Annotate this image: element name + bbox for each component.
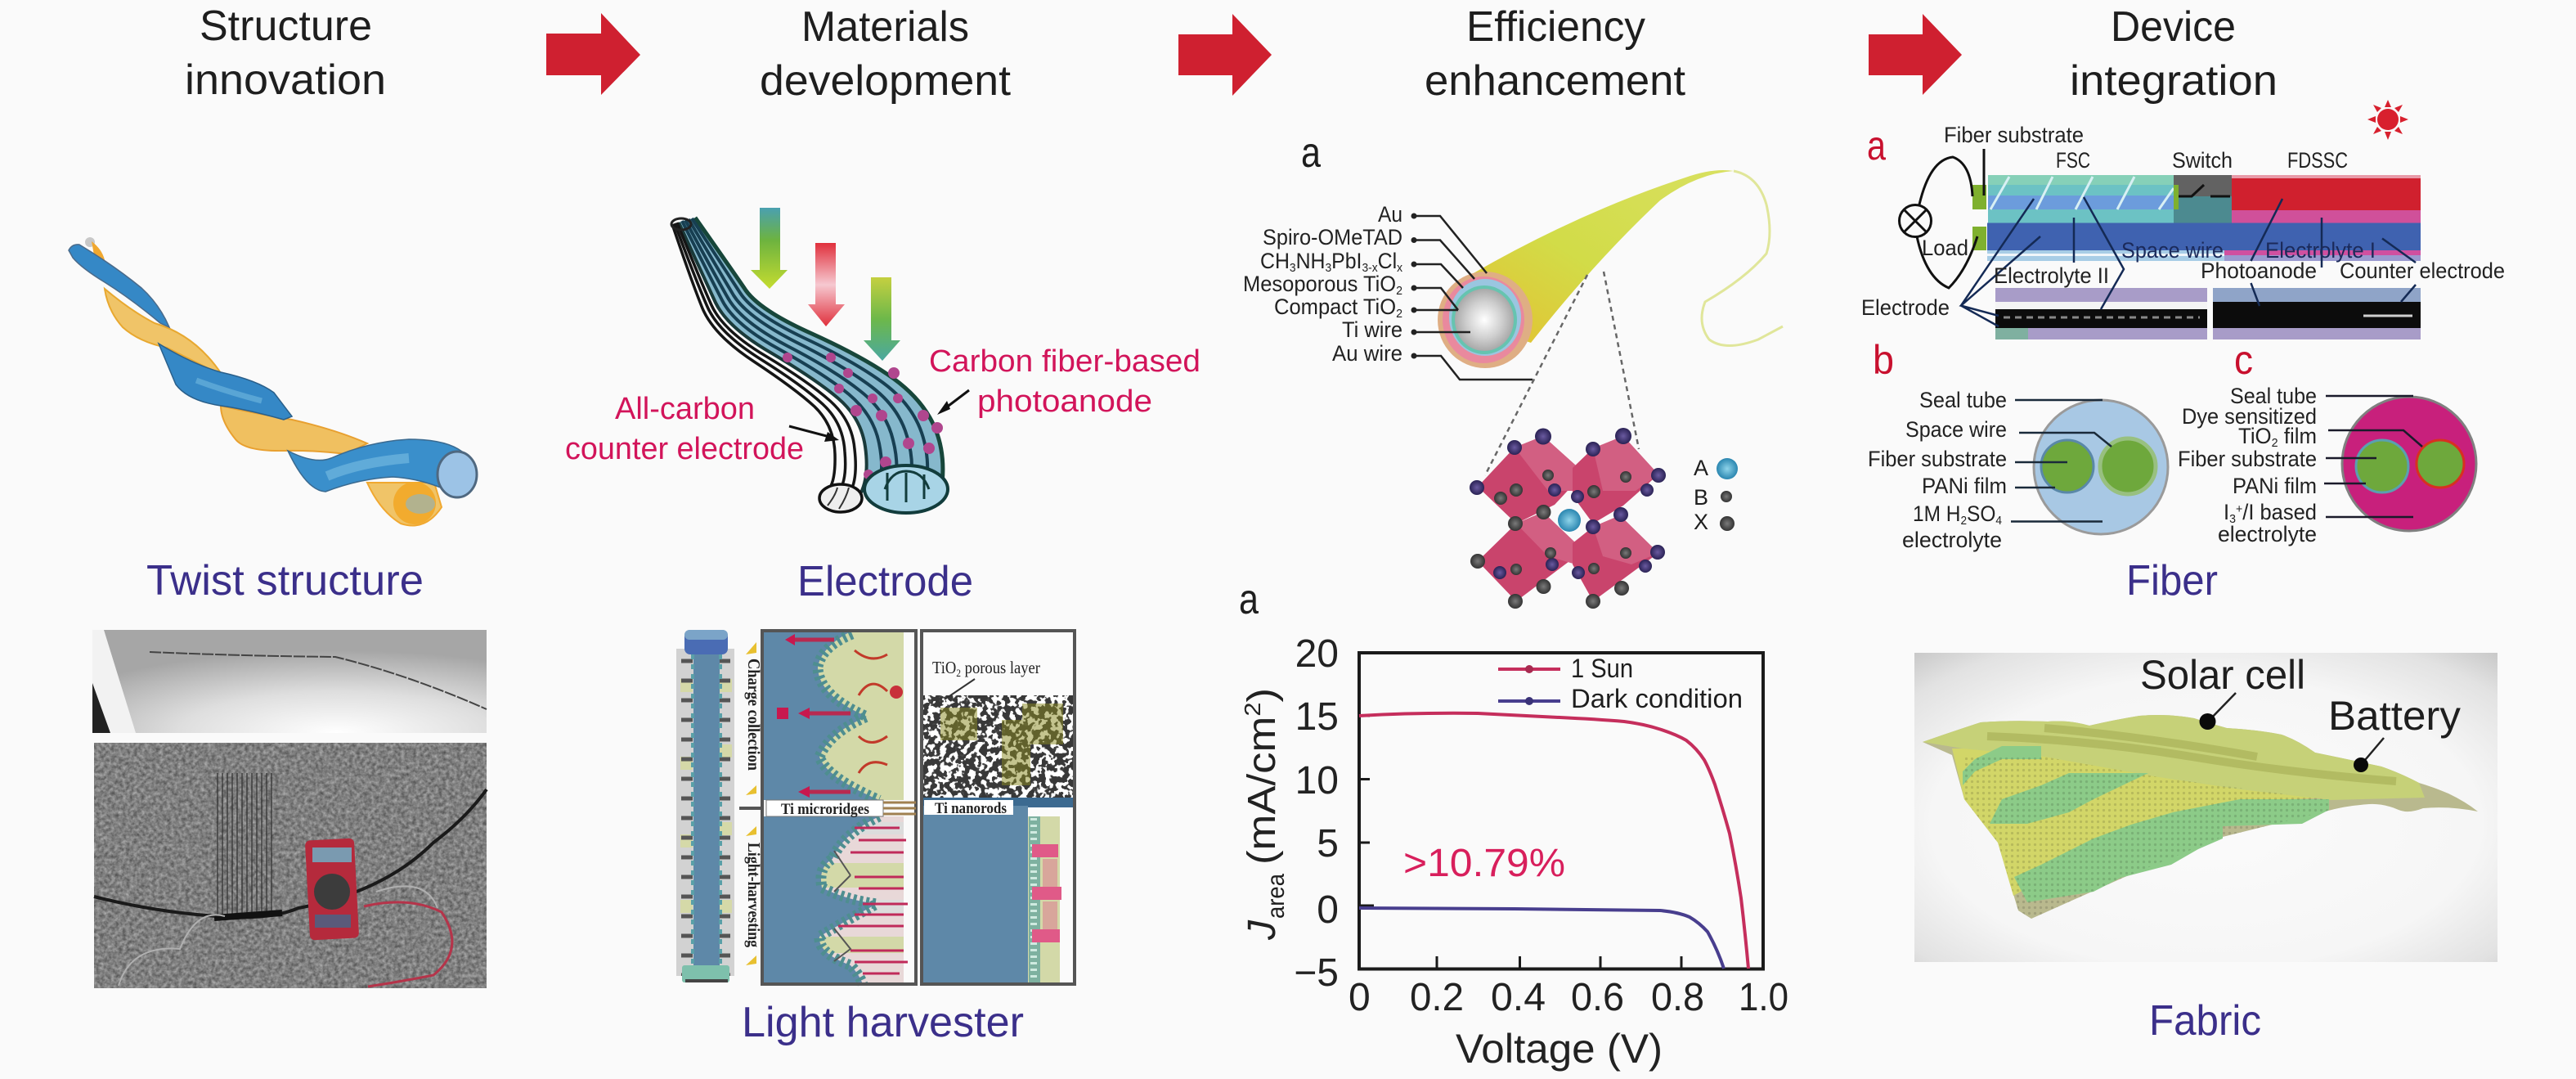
label: Carbon fiber-based photoanode — [929, 344, 1200, 419]
label: Solar cell — [2140, 652, 2305, 730]
label: Carbon fiber-based photoanode: photoanode — [977, 384, 1152, 419]
panel label: a (device): a — [1867, 123, 1886, 169]
arrow 2 — [1178, 14, 1272, 96]
photo: fabric with multimeter — [94, 743, 487, 988]
heading: Device integration: Device — [2111, 3, 2236, 51]
label: Fabric: Fabric — [2149, 997, 2261, 1045]
chart: x axis labels: 0.4 — [1491, 976, 1546, 1019]
chart: x axis labels: 0.6 — [1571, 976, 1624, 1019]
harvester: vertical labels: Charge collection — [744, 659, 764, 771]
legend: crystal atoms — [1694, 456, 1738, 534]
labels: cell layers: 3 — [1290, 261, 1296, 275]
labels: cell layers: Spiro-OMeTAD — [1263, 225, 1402, 250]
diagram: solar cell cross-section c: Fiber substrate — [2178, 447, 2317, 471]
chart: J-V curve — [1240, 632, 1788, 1072]
diagram: solar cell cross-section c: PANi film — [2233, 474, 2317, 498]
chart: legend: 1 Sun — [1571, 654, 1633, 683]
diagram: solar cell cross-section c: + — [2236, 502, 2242, 516]
diagram: supercapacitor cross-section b: PANi film — [1922, 474, 2007, 498]
illustration: carbon fiber electrode — [671, 218, 948, 513]
chart: y axis title: area — [1263, 874, 1290, 919]
harvester: vertical labels: Light-harvesting — [744, 843, 764, 947]
chart: y axis labels: 15 — [1295, 695, 1339, 739]
chart: y axis labels: 0 — [1317, 888, 1339, 932]
diagram: perovskite wire cross-section — [1411, 170, 1783, 380]
zoom guide lines — [1485, 272, 1639, 475]
legend: crystal atoms: A — [1694, 456, 1708, 480]
label: Solar cell: Solar cell — [2140, 652, 2305, 698]
diagram: supercapacitor cross-section b: 1M H — [1913, 501, 1966, 526]
panel label: a (chart): a — [1239, 576, 1259, 623]
device: microscope images — [1995, 288, 2421, 339]
device: bar layers — [1972, 175, 2421, 261]
diagram: supercapacitor cross-section b: electrolyte — [1902, 528, 2002, 552]
heading: Materials development — [760, 3, 1012, 105]
photo: long fiber — [92, 630, 487, 733]
heading: Structure innovation — [185, 2, 386, 104]
chart: y axis title: (mA/cm — [1241, 730, 1284, 865]
chart: plot frame and ticks — [1359, 653, 1763, 969]
device: text labels: Fiber substrate — [1944, 123, 2084, 147]
heading: Structure innovation: Structure — [200, 2, 372, 50]
labels: cell layers: 2 — [1396, 307, 1402, 321]
arrow 1 — [546, 13, 640, 95]
label: Carbon fiber-based photoanode: Carbon fiber-based — [929, 344, 1200, 379]
chart: x axis labels — [1349, 976, 1788, 1019]
diagram: supercapacitor cross-section b: 2 — [1960, 514, 1967, 528]
harvester: Ti nanorods panel: porous layer — [961, 658, 1040, 677]
chart: efficiency value: >10.79% — [1403, 842, 1565, 885]
labels: cell layers: PbI — [1331, 249, 1362, 273]
diagram: solar cell cross-section c: I — [2224, 500, 2230, 524]
harvester: Ti nanorods panel: 2 — [956, 667, 961, 679]
device: text labels: Counter electrode — [2340, 259, 2505, 283]
diagram: supercapacitor cross-section b: Seal tube — [1919, 388, 2007, 412]
label: Light harvester: Light harvester — [742, 999, 1024, 1046]
device: text labels: FDSSC — [2287, 148, 2348, 173]
device: text labels: FSC — [2056, 148, 2090, 173]
chart: y axis title: 2 — [1240, 703, 1265, 717]
arrow 3 — [1869, 14, 1962, 95]
harvester: Ti nanorods panel: Ti nanorods — [935, 800, 1007, 817]
legend: crystal atoms: B — [1694, 485, 1708, 510]
labels: cell layers: Ti wire — [1342, 317, 1402, 342]
device: load circuit — [1899, 149, 1984, 288]
heading: Materials development: Materials — [801, 3, 969, 51]
diagram: solar cell cross-section c: 2 — [2272, 436, 2278, 450]
diagram: solar cell cross-section c: Seal tube — [2230, 384, 2317, 408]
labels: cell layers: Mesoporous TiO — [1243, 272, 1405, 296]
label: Battery — [2328, 693, 2461, 772]
diagram: supercapacitor cross-section b: Fiber substrate — [1868, 447, 2007, 471]
heading: Efficiency enhancement: Efficiency — [1466, 3, 1645, 51]
device: text labels: Electrolyte II — [1994, 263, 2109, 288]
panel label: b: b — [1873, 337, 1894, 383]
heading: Structure innovation: innovation — [185, 56, 386, 104]
device: leader lines — [1961, 197, 2416, 326]
chart: y axis labels: −5 — [1294, 951, 1339, 995]
heading: Device integration — [2070, 3, 2278, 105]
chart: y axis labels — [1294, 632, 1339, 995]
diagram: solar cell cross-section c — [2178, 384, 2476, 546]
chart: y axis labels: 20 — [1295, 632, 1339, 676]
labels: cell layers: 3 — [1325, 261, 1331, 275]
diagram: solar cell cross-section c: Dye sensitized — [2182, 404, 2317, 429]
fabric: base cloth — [1923, 715, 2478, 919]
label: Fiber: Fiber — [2126, 557, 2218, 605]
heading: Device integration: integration — [2070, 57, 2278, 105]
labels: cell layers: Au — [1378, 202, 1402, 227]
chart: legend: Dark condition — [1571, 684, 1743, 713]
label: All-carbon counter electrode: counter electrode — [565, 432, 804, 466]
labels: cell layers: 3-x — [1362, 261, 1378, 275]
harvester: Ti nanorods panel: TiO — [932, 658, 959, 677]
diagram: perovskite crystal — [1470, 428, 1666, 609]
chart: y axis labels: 10 — [1295, 759, 1339, 803]
heading: Materials development: development — [760, 57, 1012, 105]
labels: cell layers: CH — [1260, 249, 1292, 273]
device: text labels: Electrolyte I — [2265, 238, 2376, 263]
chart: y axis labels: 5 — [1317, 822, 1339, 865]
chart: x axis labels: 0 — [1349, 976, 1371, 1019]
fabric: smooth upper zone — [1923, 715, 2425, 800]
chart: x axis labels: 0.8 — [1651, 976, 1704, 1019]
harvester: Ti microridges panel — [762, 631, 916, 984]
legend: crystal atoms: X — [1694, 510, 1708, 534]
icon: light arrows — [751, 208, 900, 361]
diagram: solar cell cross-section c: electrolyte — [2218, 522, 2317, 546]
diagram: supercapacitor cross-section b: SO — [1967, 501, 1995, 526]
diagram: solar cell cross-section c: /I based — [2242, 500, 2317, 524]
diagram: integrated fiber device — [1861, 123, 2505, 339]
chart: x axis labels: 1.0 — [1739, 976, 1788, 1019]
device: text labels: Load — [1922, 236, 1968, 260]
illustration: twisted fiber — [69, 237, 477, 525]
harvester: electrode column — [676, 630, 734, 982]
fabric: weave texture — [1963, 757, 2331, 919]
harvester: vertical labels — [739, 642, 765, 965]
panel label: a (cell): a — [1301, 129, 1321, 177]
heading: Efficiency enhancement: enhancement — [1425, 57, 1686, 105]
labels: cell layers: NH — [1296, 249, 1325, 273]
fabric: upper green streaks — [1963, 746, 2041, 785]
labels: cell layers — [1243, 202, 1402, 366]
heading: Efficiency enhancement — [1425, 3, 1686, 105]
fabric: middle green band — [1990, 773, 2148, 824]
chart: x axis labels: 0.2 — [1410, 976, 1464, 1019]
device: text labels: Space wire — [2121, 238, 2224, 263]
chart: legend — [1498, 654, 1743, 713]
labels: cell layers: Au wire — [1332, 341, 1402, 366]
diagram: solar cell cross-section c: 3 — [2229, 512, 2236, 526]
label: Battery: Battery — [2328, 693, 2461, 739]
labels: cell layers: 2 — [1396, 284, 1402, 298]
label: All-carbon counter electrode: All-carbon — [615, 392, 755, 426]
label: Electrode: Electrode — [797, 558, 973, 605]
labels: cell layers: Cl — [1378, 249, 1397, 273]
label: All-carbon counter electrode — [565, 392, 839, 466]
device: text labels — [1861, 123, 2505, 320]
diagram: supercapacitor cross-section b — [1868, 388, 2168, 552]
label: Twist structure: Twist structure — [146, 557, 424, 605]
chart: y axis title: J — [1241, 919, 1284, 941]
diagram: solar cell cross-section c: TiO — [2238, 424, 2273, 448]
chart: 1 Sun curve — [1359, 713, 1748, 969]
harvester: Ti microridges panel: Ti microridges — [781, 801, 869, 818]
illustration: woven fabric — [1914, 653, 2497, 962]
diagram: light harvester — [676, 630, 1075, 984]
panel label: c: c — [2234, 337, 2253, 383]
fabric: lower green band — [2014, 799, 2329, 902]
device: text labels: Electrode — [1861, 295, 1950, 320]
device: text labels: Photoanode — [2201, 259, 2317, 283]
labels: cell layers: x — [1397, 261, 1402, 275]
chart: x axis title: Voltage (V) — [1456, 1026, 1663, 1072]
diagram: solar cell cross-section c: film — [2278, 424, 2317, 448]
diagram: supercapacitor cross-section b: 4 — [1995, 514, 2002, 528]
icon: sun — [2367, 100, 2408, 140]
chart: dark curve — [1359, 908, 1724, 969]
chart: y axis title — [1240, 688, 1290, 941]
diagram: supercapacitor cross-section b: Space wire — [1905, 417, 2007, 442]
labels: cell layers: Compact TiO — [1274, 294, 1403, 319]
device: text labels: Switch — [2172, 148, 2233, 173]
fabric: yellow woven zone — [1952, 749, 2339, 896]
chart: y axis title: ) — [1241, 688, 1284, 703]
harvester: Ti nanorods panel — [922, 631, 1075, 984]
